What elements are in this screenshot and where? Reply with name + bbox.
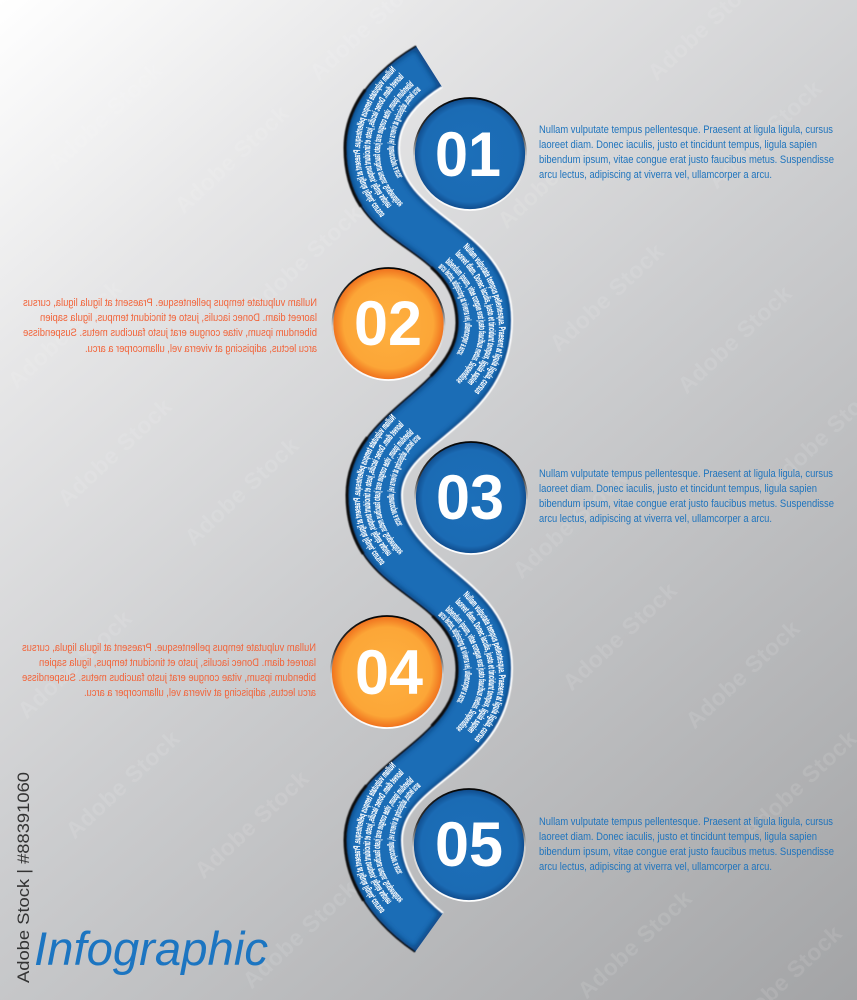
ribbon text 2: arcu lectus, adipiscing at viverra vel, ullamcorper a arcu. <box>438 264 472 356</box>
ribbon text 3: arcu lectus, adipiscing at viverra vel, ullamcorper a arcu. <box>387 434 421 526</box>
ribbon text 3: Nullam vulputate tempus pellentesque. Praesent at ligula ligula, cursus <box>353 414 396 566</box>
ribbon text 2: Nullam vulputate tempus pellentesque. Praesent at ligula ligula, cursus <box>463 242 506 394</box>
ribbon text 4: laoreet diam. Donec iaculis, justo et tincidunt tempus, ligula sapien <box>455 597 496 733</box>
watermark: Adobe Stock <box>2 275 127 393</box>
watermark: Adobe Stock <box>12 605 137 723</box>
step 01 badge <box>414 98 526 210</box>
text block 03: arcu lectus, adipiscing at viverra vel, ullamcorper a arcu. <box>539 513 772 525</box>
step 02 badge <box>332 268 444 380</box>
watermark: Adobe Stock <box>557 577 682 695</box>
step 04 badge <box>331 616 443 728</box>
ribbon text 1: bibendum ipsum, vitae congue erat justo faucibus metus. Suspendisse <box>373 80 414 206</box>
text block 04 (mirrored): arcu lectus, adipiscing at viverra vel, ullamcorper a arcu. <box>84 687 316 699</box>
ribbon light edge <box>399 87 512 913</box>
ribbon text 5: bibendum ipsum, vitae congue erat justo faucibus metus. Suspendisse <box>373 776 414 902</box>
watermark: Adobe Stock <box>507 465 632 583</box>
ribbon text 2 <box>438 242 506 394</box>
ribbon text 5: Nullam vulputate tempus pellentesque. Praesent at ligula ligula, cursus <box>353 762 396 914</box>
ribbon text 5: arcu lectus, adipiscing at viverra vel, ullamcorper a arcu. <box>387 782 421 874</box>
ribbon text 1: arcu lectus, adipiscing at viverra vel, ullamcorper a arcu. <box>387 86 421 178</box>
step 01 badge: 01 <box>435 120 501 190</box>
ribbon text 2: bibendum ipsum, vitae congue erat justo faucibus metus. Suspendisse <box>445 257 486 384</box>
step 02 badge: 02 <box>354 289 422 359</box>
ribbon text 4 <box>438 590 506 742</box>
stock credit: Adobe Stock | #88391060 <box>14 772 33 983</box>
watermark: Adobe Stock <box>42 57 167 175</box>
step 03 badge: 03 <box>436 463 504 533</box>
text block 05: arcu lectus, adipiscing at viverra vel, ullamcorper a arcu. <box>539 861 772 873</box>
ribbon text 1: laoreet diam. Donec iaculis, justo et tincidunt tempus, ligula sapien <box>363 72 404 208</box>
ribbon text 1 <box>353 66 421 218</box>
ribbon text 4: Nullam vulputate tempus pellentesque. Praesent at ligula ligula, cursus <box>463 590 506 742</box>
step 03 badge <box>415 442 527 554</box>
watermark: Adobe Stock <box>242 200 367 318</box>
ribbon text 3 <box>353 414 421 566</box>
ribbon text 5 <box>353 762 421 914</box>
text block 01 <box>539 124 834 181</box>
watermark: Adobe Stock <box>189 765 314 883</box>
watermark: Adobe Stock <box>702 75 827 193</box>
ribbon text 5: laoreet diam. Donec iaculis, justo et tincidunt tempus, ligula sapien <box>363 768 404 904</box>
ribbon text 1: Nullam vulputate tempus pellentesque. Praesent at ligula ligula, cursus <box>353 66 396 218</box>
watermark: Adobe Stock <box>237 875 362 993</box>
ribbon text 2: laoreet diam. Donec iaculis, justo et tincidunt tempus, ligula sapien <box>455 249 496 385</box>
watermark: Adobe Stock <box>572 885 697 1000</box>
ribbon text 4: bibendum ipsum, vitae congue erat justo faucibus metus. Suspendisse <box>445 605 486 732</box>
watermark: Adobe Stock <box>60 725 185 843</box>
ribbon inner shading <box>345 46 512 952</box>
ribbon body <box>345 46 512 952</box>
ribbon text 3: bibendum ipsum, vitae congue erat justo faucibus metus. Suspendisse <box>373 428 414 554</box>
watermark: Adobe Stock <box>680 615 805 733</box>
step 04 badge: 04 <box>355 638 423 708</box>
text block 03 <box>539 468 834 525</box>
watermark: Adobe Stock <box>544 238 669 356</box>
text block 02 (mirrored): arcu lectus, adipiscing at viverra vel, ullamcorper a arcu. <box>85 343 317 355</box>
ribbon <box>342 44 514 953</box>
text block 01: arcu lectus, adipiscing at viverra vel, ullamcorper a arcu. <box>539 169 772 181</box>
title: Infographic <box>34 922 268 975</box>
watermark: Adobe Stock <box>672 280 797 398</box>
watermark: Adobe Stock <box>169 100 294 218</box>
step 05 badge: 05 <box>435 810 503 880</box>
step 05 badge <box>413 789 525 901</box>
watermark: Adobe Stock <box>492 115 617 233</box>
text block 02 (mirrored) <box>23 297 317 355</box>
watermark: Adobe Stock <box>52 393 177 511</box>
ribbon dark edge <box>345 46 457 952</box>
ribbon text 4: arcu lectus, adipiscing at viverra vel, ullamcorper a arcu. <box>438 612 472 704</box>
text block 04 (mirrored) <box>22 642 316 699</box>
ribbon text 3: laoreet diam. Donec iaculis, justo et tincidunt tempus, ligula sapien <box>363 420 404 556</box>
text block 05 <box>539 816 834 873</box>
watermark: Adobe Stock <box>179 432 304 550</box>
